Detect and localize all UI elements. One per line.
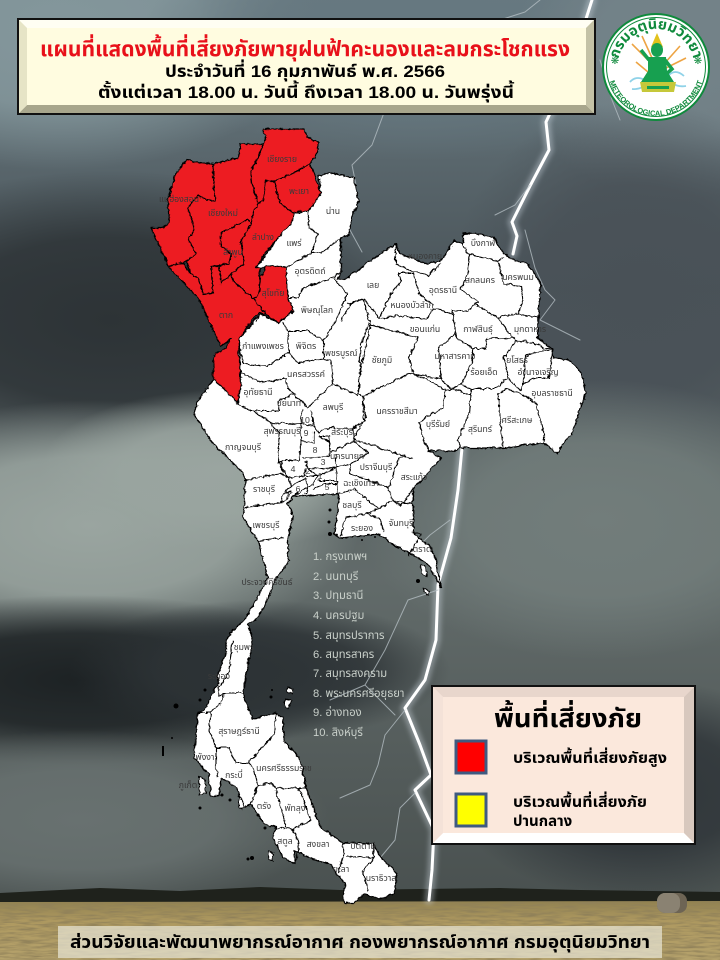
map: province labels: นราธิวาส <box>366 873 396 883</box>
icon: Meteorological Department logo: ❋ <box>611 56 619 67</box>
numbered province list: 7. สมุทรสงคราม <box>313 668 387 680</box>
icon: Meteorological Department logo <box>602 13 710 121</box>
numbered province list: 3. ปทุมธานี <box>313 590 363 602</box>
map: province labels: 10 <box>300 415 310 425</box>
horizon and field <box>0 887 720 960</box>
map: white provinces silhouette <box>193 172 585 902</box>
map: province labels: ตาก <box>219 310 233 320</box>
map: province labels: เชียงใหม่ <box>208 208 238 218</box>
numbered province list: 4. นครปฐม <box>313 610 364 622</box>
map: province labels: สระแก้ว <box>401 472 427 482</box>
map: province labels: หนองบัวลำภู <box>390 300 434 311</box>
icon: Meteorological Department logo: ❋ <box>694 56 702 67</box>
map: province labels: น่าน <box>326 206 340 216</box>
province: Chiang Mai <box>185 143 262 293</box>
map: province labels: ระนอง <box>208 671 230 681</box>
map: province labels: พะเยา <box>289 186 309 196</box>
map: province labels: นครศรีธรรมราช <box>256 763 312 773</box>
map: small islands <box>162 508 420 860</box>
map: province labels: สระบุรี <box>331 427 353 437</box>
map: province labels: พิษณุโลก <box>301 305 333 315</box>
province: Sukhothai <box>253 265 293 322</box>
map: province labels: มุกดาหาร <box>514 324 546 334</box>
map: province labels: มหาสารคาม <box>435 351 475 361</box>
map: province labels: ปัตตานี <box>350 841 376 851</box>
numbered province list: 6. สมุทรสาคร <box>313 649 375 661</box>
map: province labels: สุราษฎร์ธานี <box>218 726 260 736</box>
map: province labels: ปราจีนบุรี <box>360 462 393 472</box>
map: province labels: เลย <box>367 280 379 290</box>
map: province labels: กระบี่ <box>225 769 243 780</box>
map: province labels: กาญจนบุรี <box>225 442 261 452</box>
numbered province list: 5. สมุทรปราการ <box>313 630 385 642</box>
map: province labels: ตราด <box>413 544 431 554</box>
map: province labels: ราชบุรี <box>253 484 275 494</box>
map: province labels: ชลบุรี <box>342 500 362 510</box>
map: province labels: บุรีรัมย์ <box>426 419 450 429</box>
legend label: high risk: บริเวณพื้นที่เสี่ยงภัยสูง <box>513 747 667 768</box>
map: province labels: นครนายก <box>330 451 364 461</box>
panel: title box <box>18 19 595 114</box>
legend swatch: medium risk <box>456 794 486 826</box>
map: province labels: สุรินทร์ <box>468 424 492 434</box>
map: province labels: ตรัง <box>257 801 272 811</box>
map: province labels: นครราชสีมา <box>376 406 418 416</box>
map: province labels: 4 <box>291 464 296 474</box>
map: province labels: พัทลุง <box>285 803 306 813</box>
map: province labels: 3 <box>321 457 326 467</box>
map: province labels: ประจวบคีรีขันธ์ <box>242 577 293 587</box>
map: province labels: 8 <box>313 445 318 455</box>
map: province labels: 5 <box>325 482 330 492</box>
map: province labels: ลพบุรี <box>323 402 344 412</box>
map: province labels: สงขลา <box>307 839 329 849</box>
map: province labels: 2 <box>306 466 311 476</box>
map: province labels: 1 <box>318 471 323 481</box>
province: Phayao <box>273 163 320 212</box>
map: province labels: อุทัยธานี <box>243 387 273 397</box>
map: province labels: สุพรรณบุรี <box>264 426 301 436</box>
map: province labels: หนองคาย <box>408 251 442 261</box>
province: Tak <box>167 262 265 402</box>
numbered province list: 8. พระนครศรีอยุธยา <box>313 688 404 700</box>
map: province labels: นครพนม <box>502 272 534 282</box>
map: province labels: สตูล <box>277 836 293 847</box>
map: province labels: 6 <box>296 484 301 494</box>
icon: Meteorological Department logo: METEOROLOGICAL DEPARTMENT <box>610 80 702 116</box>
map: province labels: ศรีสะเกษ <box>502 415 533 425</box>
map: province labels: ชุมพร <box>234 642 254 652</box>
map: province labels: อำนาจเจริญ <box>517 367 559 377</box>
map: province labels: อุบลราชธานี <box>531 388 573 398</box>
map: province labels: กาฬสินธุ์ <box>463 324 493 334</box>
map: province labels: เชียงราย <box>267 154 297 164</box>
map: province labels: ฉะเชิงเทรา <box>343 478 379 488</box>
icon: Meteorological Department logo: กรมอุตุนิยมวิทยา <box>612 18 701 58</box>
panel: legend <box>432 686 695 844</box>
map: province labels: แม่ฮ่องสอน <box>159 194 199 204</box>
map: province labels: ลำปาง <box>252 232 274 242</box>
numbered province list: 10. สิงห์บุรี <box>313 727 363 739</box>
map: province labels: แพร่ <box>286 238 302 248</box>
map: province labels: สุโขทัย <box>262 288 284 298</box>
map: province labels: 9 <box>304 428 309 438</box>
map: coastal islands <box>198 564 428 860</box>
map: province labels: ลำพูน <box>223 247 243 258</box>
map: province labels: 7 <box>285 491 290 501</box>
title heading: แผนที่แสดงพื้นที่เสี่ยงภัยพายุฝนฟ้าคะนองและลมกระโชกแรง <box>40 34 570 62</box>
map: province labels: เพชรบูรณ์ <box>323 348 358 359</box>
map: province labels: ภูเก็ต <box>179 780 197 791</box>
lightning bolts <box>330 0 620 900</box>
province: Chiang Rai <box>250 128 318 202</box>
map: Thailand provinces <box>150 128 585 902</box>
footer band: ส่วนวิจัยและพัฒนาพยากรณ์อากาศ กองพยากรณ์อากาศ กรมอุตุนิยมวิทยา <box>70 932 650 953</box>
map: province labels: เพชรบุรี <box>253 520 280 530</box>
map: province labels: ชัยนาท <box>277 398 301 408</box>
numbered province list: 9. อ่างทอง <box>313 706 362 719</box>
legend label: medium risk <box>513 791 647 830</box>
numbered province list: 1. กรุงเทพฯ <box>313 551 367 563</box>
numbered province list: 2. นนทบุรี <box>313 571 359 583</box>
map: province labels: จันทบุรี <box>389 518 414 528</box>
map: province boundaries <box>197 210 552 890</box>
map: red high-risk provinces <box>150 128 320 402</box>
date line: ประจำวันที่ 16 กุมภาพันธ์ พ.ศ. 2566 <box>165 59 445 82</box>
footer band <box>58 926 662 958</box>
map: province labels: กำแพงเพชร <box>242 341 284 351</box>
legend title: พื้นที่เสี่ยงภัย <box>494 700 642 733</box>
map: province labels: ยโสธร <box>506 355 528 365</box>
map: province labels: ชัยภูมิ <box>372 355 392 366</box>
province: Lamphun <box>218 218 250 283</box>
numbered province list <box>313 551 404 739</box>
map: province shapes <box>150 128 585 902</box>
map: province labels: อุตรดิตถ์ <box>295 266 325 276</box>
legend label: medium risk: บริเวณพื้นที่เสี่ยงภัย <box>513 791 647 811</box>
map: province labels: พิจิตร <box>296 341 316 351</box>
map: province labels: สกลนคร <box>465 275 495 285</box>
map: province labels <box>159 154 573 883</box>
legend label: medium risk: ปานกลาง <box>513 813 572 830</box>
time line: ตั้งแต่เวลา 18.00 น. วันนี้ ถึงเวลา 18.00 น. วันพรุ่งนี้ <box>98 80 515 103</box>
province: Lampang <box>230 180 293 298</box>
map: province labels: ร้อยเอ็ด <box>470 367 498 377</box>
map: province labels: ขอนแก่น <box>410 324 440 334</box>
map: province labels: ยะลา <box>333 864 349 874</box>
map: province labels: ระยอง <box>351 523 373 533</box>
icon: hay bale <box>657 893 687 913</box>
map: province labels: นครสวรรค์ <box>287 369 325 379</box>
legend swatch: high risk <box>456 741 486 773</box>
map: province labels: อุดรธานี <box>429 285 457 295</box>
province: Mae Hong Son <box>150 160 215 265</box>
map: province labels: บึงกาฬ <box>471 238 495 248</box>
map: province labels: พังงา <box>196 752 214 762</box>
